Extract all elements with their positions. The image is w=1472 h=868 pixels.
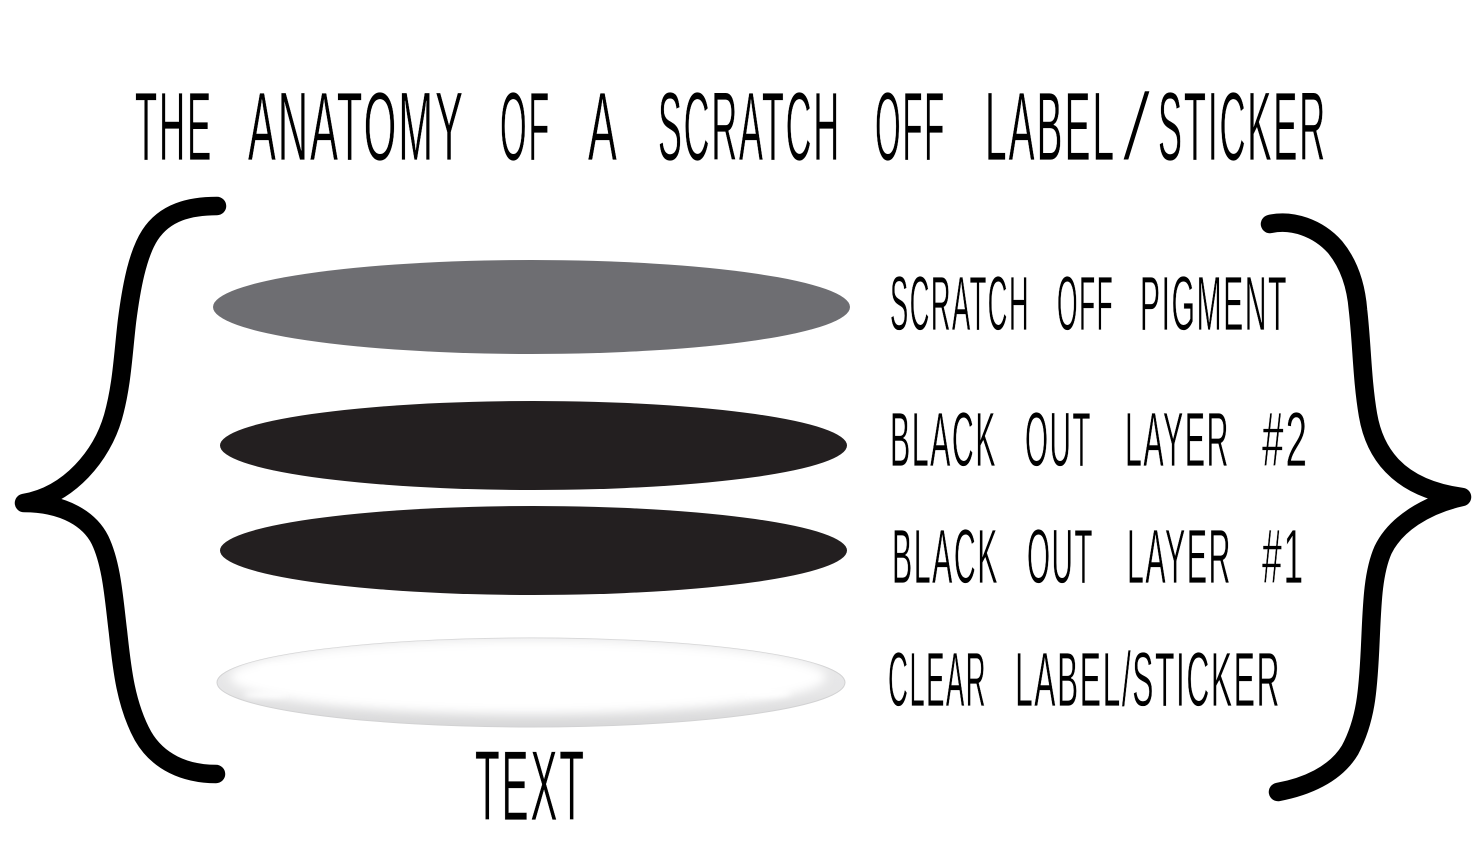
title <box>135 72 1327 181</box>
title: ANATOMY <box>248 72 465 181</box>
title: A <box>588 72 619 181</box>
title: / <box>1121 72 1152 181</box>
layer: clear label ellipse <box>217 638 845 727</box>
layer: scratch off pigment ellipse <box>213 260 850 354</box>
label: scratch off pigment: OFF <box>1057 261 1114 347</box>
label: scratch off pigment: SCRATCH <box>890 261 1030 347</box>
label: black out layer 1 <box>892 514 1305 600</box>
title: SCRATCH <box>658 72 841 181</box>
title: OFF <box>875 72 946 181</box>
label: black out layer 2: OUT <box>1025 397 1092 483</box>
label: black out layer 1: BLACK <box>892 514 999 600</box>
left curly brace <box>24 206 217 774</box>
label: black out layer 2 <box>890 397 1309 483</box>
text: TEXT <box>475 730 586 841</box>
right curly brace <box>1270 223 1462 792</box>
title: LABEL <box>985 72 1116 181</box>
label: black out layer 2: #2 <box>1262 397 1309 483</box>
title: THE <box>135 72 213 181</box>
title: OF <box>500 72 551 181</box>
label: black out layer 2: BLACK <box>890 397 997 483</box>
label: black out layer 2: LAYER <box>1125 397 1230 483</box>
label: clear label sticker: CLEAR <box>888 637 987 723</box>
layer: black out layer 1 ellipse <box>220 506 847 595</box>
layer: black out layer 2 ellipse <box>220 401 847 490</box>
label: black out layer 1: LAYER <box>1127 514 1232 600</box>
label: black out layer 1: OUT <box>1027 514 1094 600</box>
text: #1 <box>1262 514 1305 600</box>
